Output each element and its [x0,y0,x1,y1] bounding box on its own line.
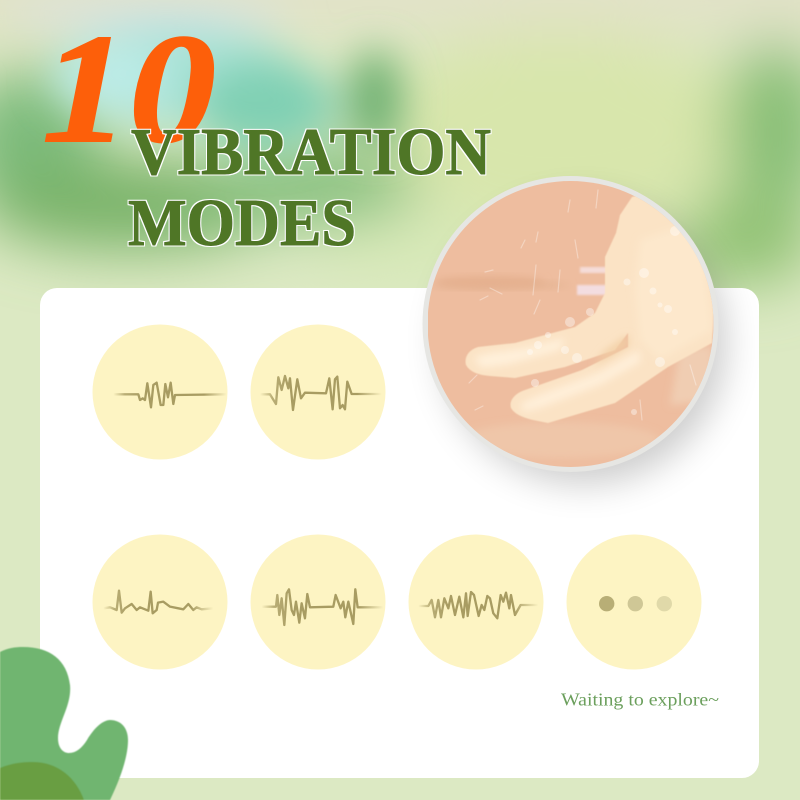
white content card [40,288,759,778]
title: VIBRATION MODES [128,115,491,260]
photo shadow [442,200,726,484]
title line 1: VIBRATION [131,115,491,189]
title line 2: MODES [128,186,356,260]
more modes: three dots [566,534,702,670]
mode 5 waveform [408,534,544,670]
green leaf blob [0,647,128,800]
caption: Waiting to explore~ [561,690,719,710]
splash highlight [580,267,608,273]
mode 2 waveform [250,324,386,460]
mode 4 waveform [250,534,386,670]
big number 10: 10 [42,2,216,175]
product fingers [466,190,714,423]
water droplets [527,226,680,415]
round product photo [422,176,718,472]
mode 1 waveform [92,324,228,460]
mode 3 waveform [92,534,228,670]
